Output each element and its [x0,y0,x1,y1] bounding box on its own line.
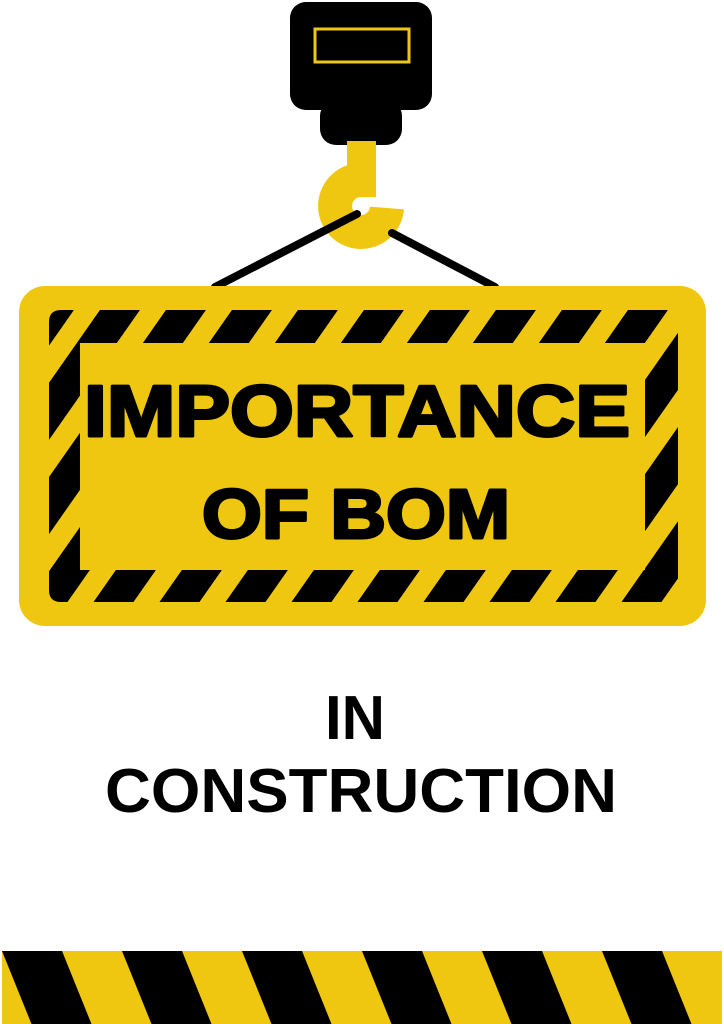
hook [335,141,387,232]
crane block [290,2,432,145]
sign [19,286,706,626]
bottom hazard band [2,951,722,1024]
ropes [215,214,495,287]
subtitle: IN [325,684,385,753]
hazard stripe frame [49,310,678,602]
subtitle [105,684,617,826]
sign title: IMPORTANCE [84,372,630,452]
subtitle: CONSTRUCTION [105,757,617,826]
sign title [84,372,630,553]
sign title: OF BOM [202,475,510,553]
display window [315,29,409,62]
